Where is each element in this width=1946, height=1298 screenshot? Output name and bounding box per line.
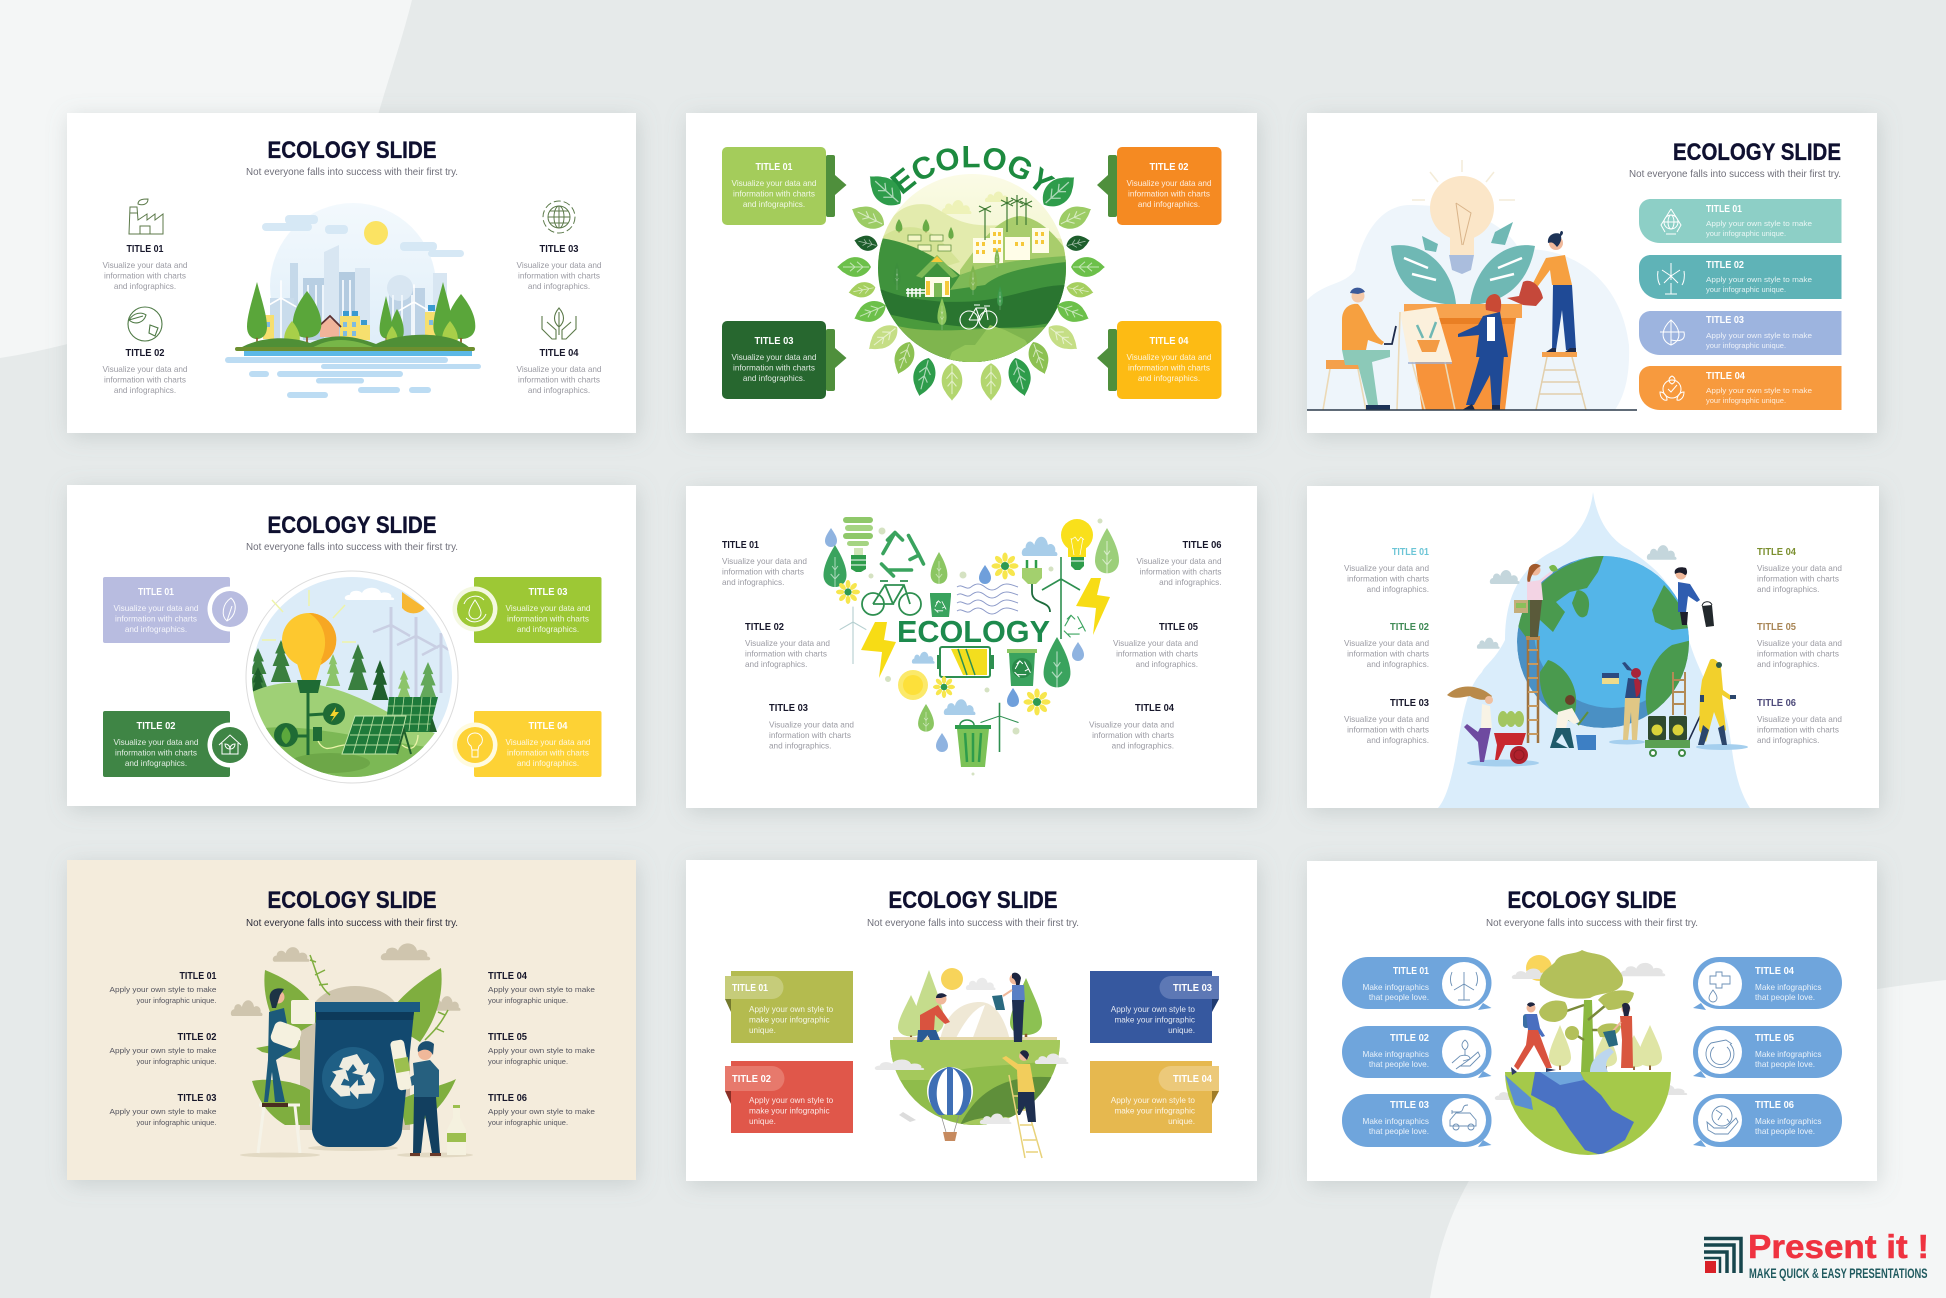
box: title 01: Visualize your data and <box>114 604 199 613</box>
item: title 01: information with charts <box>104 272 186 280</box>
speech pill: title 04: that people love. <box>1755 993 1815 1002</box>
item: title 05: Apply your own style to make <box>488 1046 595 1055</box>
panel: slide 5 heart of ecology icons <box>686 486 1257 808</box>
speech pill: title 03: that people love. <box>1369 1127 1429 1136</box>
item: title 05: TITLE 05 <box>488 1032 527 1043</box>
subtitle: Not everyone falls into success with their first try. <box>867 917 1079 929</box>
icon: spiral bulb <box>843 517 873 572</box>
item: title 01: TITLE 01 <box>1392 547 1429 558</box>
item: title 06: Visualize your data and <box>1137 557 1222 566</box>
box: title 04: information with charts <box>507 748 589 758</box>
item: title 06 <box>1137 540 1222 587</box>
box: title 04: and infographics. <box>517 759 579 768</box>
item: title 04: TITLE 04 <box>540 348 579 359</box>
item: title 06: and infographics. <box>1757 736 1819 745</box>
icon: hands holding leaf <box>542 308 576 339</box>
box: title 03 <box>452 577 602 643</box>
item: title 04: information with charts <box>518 376 600 384</box>
item: title 01 <box>1344 547 1429 594</box>
item: title 01: Apply your own style to make <box>110 985 216 994</box>
item: title 04: Visualize your data and <box>1757 564 1842 573</box>
icon: hot air balloon <box>927 1067 973 1141</box>
icon: recycling bin <box>312 1002 420 1147</box>
illustration: team growing a bulb plant <box>1307 160 1637 410</box>
arched word: ECOLOGY: ECOLOGY <box>890 146 1056 194</box>
item: title 04: TITLE 04 <box>1757 547 1796 558</box>
item: title 04 <box>488 971 595 1005</box>
item: title 02: information with charts <box>1347 650 1429 658</box>
box: title 02: and infographics. <box>1138 200 1200 209</box>
item: title 05: and infographics. <box>1136 660 1198 669</box>
ribbon box: title 04: unique. <box>1168 1117 1195 1126</box>
icon: globe with arrows <box>543 201 575 233</box>
item: title 06: TITLE 06 <box>488 1093 527 1104</box>
illustration: green globe <box>837 146 1105 401</box>
item: title 01 <box>103 244 188 291</box>
bar: title 04: Apply your own style to make <box>1706 386 1812 395</box>
ribbon box: title 02 <box>725 1061 853 1133</box>
speech pill: title 02 <box>1342 1026 1492 1078</box>
figure: person in hazmat suit <box>1696 659 1748 750</box>
item: title 03: Visualize your data and <box>517 261 602 270</box>
item: title 03: your infographic unique. <box>136 1118 216 1127</box>
figure: woman with wheelbarrow <box>1447 686 1539 766</box>
panel: slide 7 recycling bin <box>67 860 636 1180</box>
speech pill: title 04: Make infographics <box>1755 983 1821 992</box>
icon: recycle bin <box>1007 649 1037 686</box>
item: title 01: your infographic unique. <box>136 996 216 1005</box>
bar: title 02 <box>1639 255 1842 299</box>
ribbon box: title 02: Apply your own style to <box>749 1096 834 1105</box>
box: title 02: information with charts <box>115 748 197 758</box>
icon: bottle <box>447 1105 466 1155</box>
speech pill: title 02: TITLE 02 <box>1390 1033 1429 1044</box>
subtitle: Not everyone falls into success with their first try. <box>246 917 458 929</box>
speech pill: title 01: Make infographics <box>1363 983 1429 992</box>
ribbon box: title 03: TITLE 03 <box>1173 983 1212 994</box>
ribbon box: title 04: TITLE 04 <box>1173 1074 1212 1085</box>
bar: title 02: TITLE 02 <box>1706 260 1744 271</box>
background blob: bottom right <box>1430 980 1946 1298</box>
box: title 02: Visualize your data and <box>1127 179 1212 188</box>
box: title 01: and infographics. <box>125 625 187 634</box>
speech pill: title 02: that people love. <box>1369 1060 1429 1069</box>
item: title 02: information with charts <box>745 650 827 658</box>
item: title 05: Visualize your data and <box>1113 639 1198 648</box>
figure: person with sign <box>1602 662 1645 744</box>
bar: title 01: your infographic unique. <box>1706 229 1786 238</box>
item: title 05: TITLE 05 <box>1757 622 1796 633</box>
item: title 06 <box>488 1093 595 1127</box>
box: title 02 <box>1097 147 1222 225</box>
panel: slide 9 tree and earth <box>1307 861 1877 1181</box>
box: title 04 <box>1097 321 1222 399</box>
subtitle: Not everyone falls into success with their first try. <box>246 541 458 553</box>
item: title 03: and infographics. <box>1367 736 1429 745</box>
item: title 02: TITLE 02 <box>1390 622 1429 633</box>
item: title 02: and infographics. <box>114 386 176 395</box>
speech pill: title 03: Make infographics <box>1363 1117 1429 1126</box>
ribbon box: title 01: TITLE 01 <box>732 983 768 994</box>
box: title 01: and infographics. <box>743 200 805 209</box>
item: title 06: information with charts <box>1757 726 1839 734</box>
icon: right lightning <box>1076 578 1110 635</box>
leaves wreath <box>837 167 1105 401</box>
item: title 03: Visualize your data and <box>1344 715 1429 724</box>
illustration: earth and volunteers <box>1447 545 1748 766</box>
illustration: heart of ecology icons <box>823 517 1119 776</box>
item: title 04: information with charts <box>1092 731 1174 740</box>
item: title 02: TITLE 02 <box>126 348 165 359</box>
item: title 01: information with charts <box>1347 574 1429 584</box>
ribbon box: title 02: TITLE 02 <box>732 1074 771 1085</box>
heading: ECOLOGY SLIDE <box>268 137 436 164</box>
ribbon box: title 03: make your infographic <box>1114 1016 1195 1024</box>
ribbon box: title 04: Apply your own style to <box>1111 1096 1195 1105</box>
box: title 03: information with charts <box>733 364 815 372</box>
box: title 04: Visualize your data and <box>1127 353 1212 362</box>
item: title 02: and infographics. <box>1367 660 1429 669</box>
item: title 02: TITLE 02 <box>745 622 784 633</box>
box: title 01: TITLE 01 <box>756 162 793 173</box>
item: title 04: information with charts <box>1757 574 1839 584</box>
background blob: top left <box>0 0 412 358</box>
bar: title 01: Apply your own style to make <box>1706 219 1812 228</box>
item: title 03: TITLE 03 <box>540 244 579 255</box>
figure: kneeling planter <box>1550 695 1596 750</box>
heading: ECOLOGY SLIDE <box>1673 139 1841 166</box>
item: title 01: TITLE 01 <box>180 971 217 982</box>
speech pill: title 01 <box>1342 957 1492 1010</box>
box: title 02: TITLE 02 <box>136 721 176 732</box>
item: title 04 <box>1757 547 1842 594</box>
ribbon box: title 03: Apply your own style to <box>1111 1005 1195 1014</box>
illustration: recycling bin with people <box>231 943 473 1158</box>
item: title 01: Visualize your data and <box>1344 564 1429 573</box>
ribbon box: title 04: make your infographic <box>1114 1106 1195 1116</box>
item: title 04 <box>1089 703 1174 750</box>
box: title 01: information with charts <box>115 614 197 624</box>
item: title 04: Apply your own style to make <box>488 985 595 994</box>
item: title 02: information with charts <box>104 376 186 384</box>
item: title 02: your infographic unique. <box>136 1057 216 1066</box>
ribbon box: title 01: unique. <box>749 1026 776 1035</box>
figure: woman watering <box>992 973 1025 1042</box>
item: title 02 <box>745 622 830 669</box>
item: title 01: TITLE 01 <box>126 244 164 255</box>
bar: title 03: Apply your own style to make <box>1706 331 1812 340</box>
icon: trash can <box>955 720 991 767</box>
speech pill: title 01: TITLE 01 <box>1393 966 1429 977</box>
item: title 05 <box>1113 622 1198 669</box>
panel: slide 2 ecology globe <box>682 111 1265 443</box>
box: title 01 <box>103 577 252 643</box>
box: title 03 <box>722 321 846 399</box>
item: title 01: Visualize your data and <box>722 557 807 566</box>
item: title 03: TITLE 03 <box>178 1093 217 1104</box>
item: title 01 <box>110 971 217 1005</box>
box: title 01: Visualize your data and <box>732 179 817 188</box>
box: title 04: Visualize your data and <box>506 738 591 747</box>
item: title 05: information with charts <box>1757 650 1839 658</box>
item: title 02: Visualize your data and <box>103 365 188 374</box>
word: ECOLOGY: ECOLOGY <box>897 614 1050 649</box>
item: title 03: and infographics. <box>528 282 590 291</box>
item: title 05 <box>1757 622 1842 669</box>
item: title 04: TITLE 04 <box>488 971 527 982</box>
item: title 06: and infographics. <box>1159 578 1222 587</box>
illustration: solar bulb circle <box>246 571 458 783</box>
item: title 04 <box>517 348 602 395</box>
item: title 02: Apply your own style to make <box>110 1046 216 1055</box>
bar: title 02: Apply your own style to make <box>1706 275 1812 284</box>
figure: man with bucket <box>1675 567 1714 627</box>
illustration: planet with gardeners and balloon <box>875 968 1068 1158</box>
item: title 01: information with charts <box>722 568 804 576</box>
item: title 03 <box>1344 698 1429 745</box>
panel: slide 1 city and water <box>67 113 636 433</box>
icon: factory <box>129 199 163 234</box>
box: title 01: TITLE 01 <box>138 587 174 598</box>
box: title 04: TITLE 04 <box>1150 336 1189 347</box>
item: title 06: information with charts <box>1140 568 1222 576</box>
icon: sun <box>898 670 928 700</box>
item: title 03 <box>769 703 854 750</box>
bar: title 03: your infographic unique. <box>1706 341 1786 350</box>
item: title 01: and infographics. <box>722 578 784 587</box>
figure: woman on ladder <box>1514 564 1558 743</box>
icon: small recycle bin <box>930 593 951 617</box>
box: title 02: and infographics. <box>125 759 187 768</box>
speech pill: title 06 <box>1693 1094 1842 1147</box>
ribbon box: title 03: unique. <box>1168 1026 1195 1035</box>
speech pill: title 06: that people love. <box>1755 1127 1815 1136</box>
item: title 03: TITLE 03 <box>769 703 808 714</box>
box: title 02: information with charts <box>1128 190 1210 198</box>
item: title 06: Visualize your data and <box>1757 715 1842 724</box>
box: title 03: TITLE 03 <box>754 336 794 347</box>
box: title 03: Visualize your data and <box>732 353 817 362</box>
item: title 02 <box>110 1032 217 1066</box>
item: title 04: Visualize your data and <box>1089 720 1174 730</box>
item: title 03: TITLE 03 <box>1390 698 1429 709</box>
item: title 04: and infographics. <box>1112 742 1174 750</box>
speech pill: title 06: Make infographics <box>1755 1117 1821 1126</box>
heading: ECOLOGY SLIDE <box>268 512 436 539</box>
item: title 03: information with charts <box>769 731 851 740</box>
box: title 03: information with charts <box>507 614 589 624</box>
item: title 03: Apply your own style to make <box>110 1107 216 1116</box>
item: title 02: Visualize your data and <box>745 639 830 648</box>
speech pill: title 03: TITLE 03 <box>1390 1100 1429 1111</box>
ribbon box: title 03 <box>1090 971 1219 1043</box>
icon: yellow bulb <box>1061 519 1093 570</box>
figure: man with bottle <box>390 1039 441 1156</box>
bar: title 04: your infographic unique. <box>1706 396 1786 405</box>
speech pill: title 04 <box>1693 957 1842 1010</box>
item: title 05: and infographics. <box>1757 660 1819 669</box>
logo wordmark: Present it ! <box>1748 1228 1929 1265</box>
speech pill: title 01: that people love. <box>1369 993 1429 1002</box>
item: title 06: your infographic unique. <box>488 1118 568 1127</box>
speech pill: title 05: Make infographics <box>1755 1050 1821 1059</box>
item: title 01: Visualize your data and <box>103 261 188 270</box>
item: title 01: and infographics. <box>114 282 176 291</box>
item: title 03: information with charts <box>518 272 600 280</box>
bar: title 01: TITLE 01 <box>1706 204 1742 215</box>
subtitle: Not everyone falls into success with their first try. <box>1486 917 1698 929</box>
box: title 02: TITLE 02 <box>1150 162 1189 173</box>
speech pill: title 02: Make infographics <box>1363 1050 1429 1059</box>
ribbon box: title 04 <box>1090 1061 1219 1133</box>
figure: woman on stool <box>258 988 315 1153</box>
logo: Present it! <box>1704 1228 1929 1281</box>
box: title 04: TITLE 04 <box>528 721 568 732</box>
icon: earth with leaf <box>128 307 162 341</box>
panel: slide 4 bulb and solar panels <box>67 485 636 806</box>
item: title 03 <box>517 244 602 291</box>
bar: title 01 <box>1639 199 1842 243</box>
icon: recycle triangle <box>882 532 924 576</box>
bar: title 03: TITLE 03 <box>1706 315 1744 326</box>
subtitle: Not everyone falls into success with their first try. <box>246 166 458 178</box>
item: title 06: TITLE 06 <box>1757 698 1796 709</box>
figure: kneeling man <box>917 993 950 1042</box>
heading: ECOLOGY SLIDE <box>268 887 436 914</box>
ribbon box: title 01: Apply your own style to <box>749 1005 834 1014</box>
box: title 03: and infographics. <box>743 374 805 383</box>
speech pill: title 05 <box>1693 1026 1842 1078</box>
item: title 03: information with charts <box>1347 726 1429 734</box>
figure: man walking <box>1511 1002 1556 1075</box>
box: title 04: information with charts <box>1128 364 1210 372</box>
bar: title 04: TITLE 04 <box>1706 371 1745 382</box>
item: title 05: information with charts <box>1116 650 1198 658</box>
bar: title 03 <box>1639 311 1842 355</box>
item: title 05: TITLE 05 <box>1159 622 1198 633</box>
speech pill: title 04: TITLE 04 <box>1755 966 1794 977</box>
box: title 01: information with charts <box>733 190 815 198</box>
box: title 01 <box>722 147 846 225</box>
speech pill: title 03 <box>1342 1094 1492 1147</box>
heading: ECOLOGY SLIDE <box>1508 887 1676 914</box>
item: title 05: Visualize your data and <box>1757 639 1842 648</box>
item: title 02: and infographics. <box>745 660 807 669</box>
item: title 05 <box>488 1032 595 1066</box>
icon: logo mark <box>1704 1238 1741 1273</box>
ribbon box: title 01 <box>725 971 853 1043</box>
bar: title 04 <box>1639 366 1842 410</box>
item: title 04: and infographics. <box>528 386 590 395</box>
figure: barrels on cart <box>1645 672 1702 756</box>
subtitle: Not everyone falls into success with their first try. <box>1629 168 1841 180</box>
bar: title 02: your infographic unique. <box>1706 285 1786 294</box>
box: title 03: and infographics. <box>517 625 579 634</box>
speech pill: title 05: that people love. <box>1755 1060 1815 1069</box>
heading: ECOLOGY SLIDE <box>888 887 1058 914</box>
speech pill: title 06: TITLE 06 <box>1755 1100 1794 1111</box>
icon: bicycle <box>862 581 921 615</box>
item: title 04: TITLE 04 <box>1135 703 1174 714</box>
item: title 01 <box>722 540 807 587</box>
icon: plug <box>1022 560 1050 612</box>
panel: slide 3 bulb plant team <box>1307 113 1877 433</box>
ribbon box: title 01: make your infographic <box>749 1016 830 1024</box>
item: title 05: your infographic unique. <box>488 1057 568 1066</box>
item: title 06 <box>1757 698 1842 745</box>
item: title 04: Visualize your data and <box>517 365 602 374</box>
speech pill: title 05: TITLE 05 <box>1755 1033 1794 1044</box>
box: title 02 <box>103 711 252 777</box>
icon: left lightning <box>861 622 896 678</box>
figure: man on ladder <box>1002 1050 1042 1158</box>
icon: water waves <box>957 584 1018 614</box>
item: title 06: TITLE 06 <box>1182 540 1222 551</box>
item: title 03: and infographics. <box>769 742 831 750</box>
box: title 03: Visualize your data and <box>506 604 591 613</box>
ribbon box: title 02: unique. <box>749 1117 776 1126</box>
item: title 02: Visualize your data and <box>1344 639 1429 648</box>
icon: battery <box>937 647 994 677</box>
item: title 02: TITLE 02 <box>178 1032 217 1043</box>
item: title 01: and infographics. <box>1367 585 1429 594</box>
item: title 03 <box>110 1093 217 1127</box>
item: title 01: TITLE 01 <box>722 540 759 551</box>
box: title 04: and infographics. <box>1138 374 1200 383</box>
illustration: tree on half earth with people <box>1495 950 1687 1157</box>
item: title 02 <box>103 348 188 395</box>
box: title 03: TITLE 03 <box>528 587 568 598</box>
water drop background <box>1438 492 1750 808</box>
panel: slide 6 earth in water drop <box>1307 486 1879 808</box>
item: title 03: Visualize your data and <box>769 720 854 730</box>
ribbon box: title 02: make your infographic <box>749 1106 830 1116</box>
item: title 06: Apply your own style to make <box>488 1107 595 1116</box>
item: title 04: your infographic unique. <box>488 996 568 1005</box>
item: title 02 <box>1344 622 1429 669</box>
figure: woman with watering can <box>1603 1003 1633 1068</box>
item: title 04: and infographics. <box>1757 585 1819 594</box>
illustration: city with water <box>225 203 481 398</box>
panel: slide 8 planet gardeners <box>686 860 1257 1181</box>
box: title 04 <box>452 711 602 777</box>
box: title 02: Visualize your data and <box>114 738 199 747</box>
